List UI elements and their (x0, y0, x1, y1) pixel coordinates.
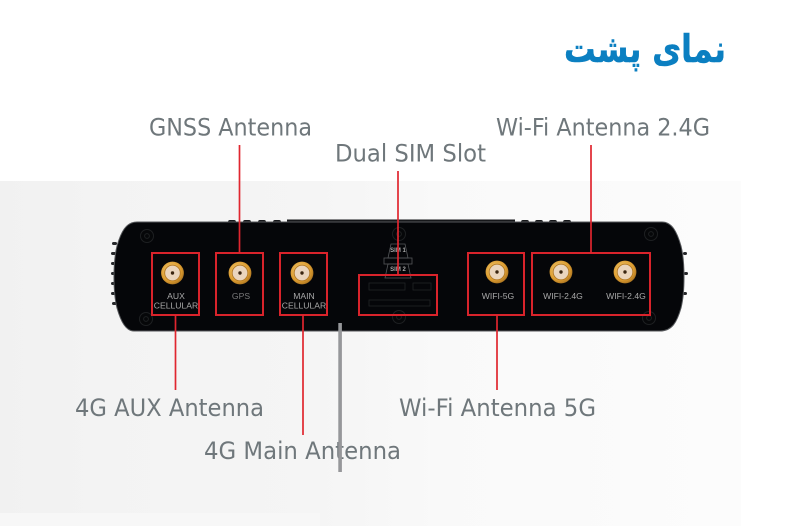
highlight box: AUX (152, 253, 199, 315)
label: GNSS Antenna: GNSS Antenna (149, 114, 312, 142)
connector: Main cellular: MAIN (293, 291, 315, 301)
connector: Wi-Fi 2.4G left: WIFI-2.4G (543, 291, 583, 301)
connector: Wi-Fi 2.4G right: WIFI-2.4G (606, 291, 646, 301)
SIM slot details (369, 283, 431, 306)
connector: Main cellular (282, 262, 326, 310)
device top vents (228, 220, 571, 224)
device screws (140, 228, 658, 326)
label: Wi-Fi Antenna 5G: Wi-Fi Antenna 5G (399, 394, 596, 422)
connector: AUX cellular: AUX (167, 291, 185, 301)
leader line: Main (302, 315, 304, 435)
connector: Wi-Fi 2.4G left (543, 261, 583, 301)
label: 4G Main Antenna: 4G Main Antenna (204, 437, 401, 465)
background panel (0, 181, 741, 526)
SIM slot icon: SIM 2 (390, 267, 406, 273)
highlight box: Wi-Fi 2.4G (532, 253, 650, 315)
SIM slot icon (384, 244, 412, 278)
leader line: Wi-Fi 2.4G (590, 145, 592, 253)
SIM slot icon: SIM 1 (390, 248, 406, 254)
leader line: GNSS (238, 145, 240, 253)
title: نمای پشت (564, 27, 726, 71)
connector: AUX cellular (154, 262, 198, 310)
highlight box: SIM (359, 275, 437, 315)
gray vertical bar (338, 323, 342, 472)
leader line: SIM (397, 171, 399, 275)
label: 4G AUX Antenna: 4G AUX Antenna (75, 394, 264, 422)
label: Dual SIM Slot: Dual SIM Slot (335, 140, 486, 168)
highlight box: Wi-Fi 5G (468, 253, 524, 315)
leader line: AUX (174, 315, 176, 390)
connector: GPS: GPS (232, 291, 250, 301)
leader line: Wi-Fi 5G (496, 315, 498, 390)
connector: Wi-Fi 5G: WIFI-5G (482, 291, 515, 301)
device: router rear panel (111, 220, 688, 331)
connector: AUX cellular: CELLULAR (154, 300, 198, 310)
connector: Main cellular: CELLULAR (282, 300, 326, 310)
connector: GPS (229, 262, 251, 301)
connector: Wi-Fi 2.4G right (606, 261, 646, 301)
device body (114, 222, 684, 331)
label: Wi-Fi Antenna 2.4G: Wi-Fi Antenna 2.4G (496, 114, 710, 142)
connector: Wi-Fi 5G (482, 261, 515, 301)
highlight box: GPS (216, 253, 263, 315)
device side fins (111, 242, 688, 305)
highlight box: Main (280, 253, 327, 315)
